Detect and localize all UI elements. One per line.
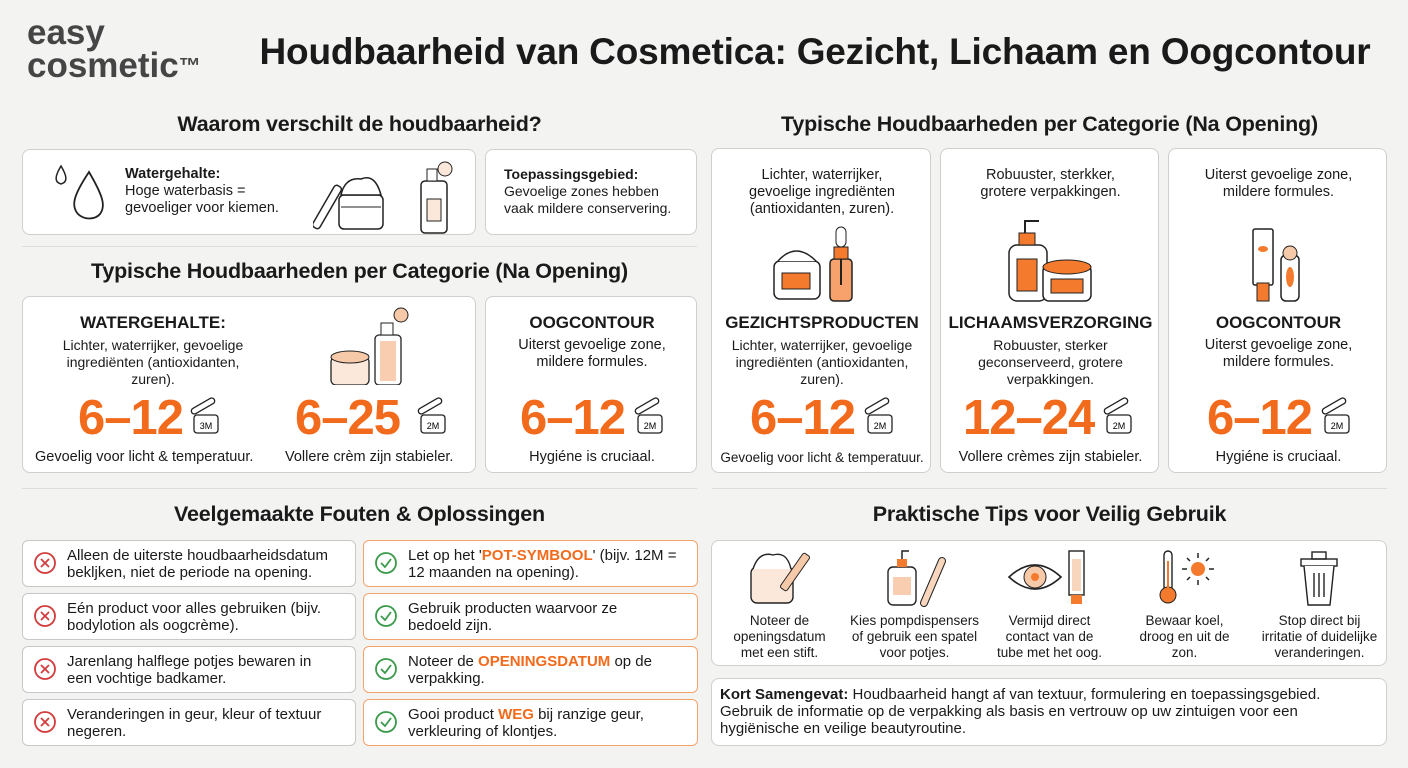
tip 5: Stop direct bij: [1279, 613, 1360, 628]
card: oogcontour: mildere formules.: [1223, 354, 1334, 370]
tip 4: Bewaar koel,: [1145, 613, 1224, 628]
heading: typische left: Typische Houdbaarheden per Categorie (Na Opening): [91, 259, 628, 283]
card: gezichtsproducten: Gevoelig voor licht & temperatuur.: [720, 450, 924, 465]
panel: left categories: Gevoelig voor licht & temperatuur.: [35, 449, 253, 465]
panel: left categories: 3M: [200, 421, 212, 431]
tip 2: [850, 550, 979, 660]
panel: oogcontour left: Hygiéne is cruciaal.: [529, 449, 655, 465]
panel: toepassingsgebied: Gevoelige zones hebben: [504, 183, 659, 199]
heading: fouten: Veelgemaakte Fouten & Oplossingen: [174, 502, 545, 526]
card: lichaamsverzorging: 12–24: [963, 391, 1094, 445]
panel: left categories: Vollere crèm zijn stabieler.: [285, 449, 453, 465]
text: watergehalte: gevoeliger voor kiemen.: [125, 200, 279, 216]
panel: oogcontour left: 6–12: [520, 391, 625, 445]
panel: toepassingsgebied: Toepassingsgebied:: [504, 166, 638, 182]
tip 3: Vermijd direct: [1009, 613, 1090, 628]
number 6-12: 6–12: [78, 391, 183, 445]
number 6-25: 6–25: [295, 391, 400, 445]
tip 4: [1139, 550, 1230, 660]
panel: tips: [711, 540, 1387, 666]
card: gezichtsproducten: (antioxidanten, zuren).: [750, 201, 894, 217]
card: gezichtsproducten: 6–12: [750, 391, 855, 445]
heading: tips: Praktische Tips voor Veilig Gebruik: [873, 502, 1226, 526]
icon: jar + dropper: [773, 226, 853, 302]
tip 1: met een stift.: [741, 645, 818, 660]
tip 3: tube met het oog.: [997, 645, 1102, 660]
card: gezichtsproducten: Lichter, waterrijker,: [762, 167, 882, 183]
card: oogcontour: OOGCONTOUR: [1216, 313, 1341, 332]
list: fouten & oplossingen: Eén product voor alles gebruiken (bijv. bodylotion als oogcrème).: [67, 600, 321, 634]
tip 2: of gebruik een spatel: [852, 629, 977, 644]
logo: easy: [27, 13, 105, 52]
card: lichaamsverzorging: Robuuster, sterkker,: [986, 167, 1115, 183]
panel: left categories: [22, 296, 476, 473]
tip 5: [1262, 551, 1377, 660]
card: gezichtsproducten: zuren).: [800, 371, 844, 387]
panel: oogcontour left: OOGCONTOUR: [529, 313, 655, 332]
list: fouten & oplossingen: Veranderingen in geur, kleur of textuur negeren.: [67, 706, 321, 740]
card: oogcontour: mildere formules.: [1223, 184, 1334, 200]
summary: Kort Samengevat: Houdbaarheid hangt af van textuur, formulering en toepassingsgebied.: [720, 686, 1320, 703]
card: gezichtsproducten: gevoelige ingrediënten: [749, 184, 895, 200]
tip 4: droog en uit de: [1139, 629, 1230, 644]
tip 3: contact van de: [1006, 629, 1093, 644]
card: lichaamsverzorging: Vollere crèmes zijn stabieler.: [959, 449, 1142, 465]
icon: jar and spray: [313, 162, 452, 234]
icon: jar + spray: [330, 308, 408, 385]
card: lichaamsverzorging: 2M: [1113, 421, 1125, 431]
panel: left categories: WATERGEHALTE:: [80, 313, 226, 332]
list: fouten & oplossingen: Noteer de OPENINGSDATUM op de verpakking.: [408, 653, 652, 687]
list: fouten & oplossingen: Alleen de uiterste houdbaarheidsdatum bekljken, niet de periode na opening.: [67, 547, 328, 581]
title: Houdbaarheid van Cosmetica: Gezicht, Lichaam en Oogcontour: [260, 31, 1370, 72]
panel: oogcontour left: Uiterst gevoelige zone,: [518, 337, 666, 353]
panel: left categories: 2M: [427, 421, 439, 431]
card: lichaamsverzorging: LICHAAMSVERZORGING: [948, 313, 1152, 332]
list: fouten & oplossingen: Gooi product WEG bij ranzige geur, verkleuring of klontjes.: [408, 706, 644, 740]
card: oogcontour: [1168, 148, 1387, 473]
card: gezichtsproducten: ingrediënten (antioxidanten,: [736, 354, 908, 370]
panel: oogcontour left: 2M: [644, 421, 656, 431]
card: gezichtsproducten: 2M: [874, 421, 886, 431]
text: watergehalte: Hoge waterbasis =: [125, 183, 246, 199]
logo: [27, 13, 201, 85]
tip 1: [733, 552, 826, 660]
card: gezichtsproducten: [711, 148, 931, 473]
list: fouten & oplossingen: Jarenlang halflege potjes bewaren in een vochtige badkamer.: [67, 653, 311, 687]
icon: water drops: [55, 164, 104, 220]
card: lichaamsverzorging: Robuuster, sterker: [993, 337, 1108, 353]
panel: toepassingsgebied: [485, 149, 697, 235]
panel: watergehalte: [22, 149, 476, 235]
tip 1: openingsdatum: [733, 629, 826, 644]
card: lichaamsverzorging: [940, 148, 1159, 473]
heading: typische right: Typische Houdbaarheden per Categorie (Na Opening): [781, 112, 1318, 136]
card: lichaamsverzorging: grotere verpakkingen.: [980, 184, 1121, 200]
heading: waarom: Waarom verschilt de houdbaarheid?: [177, 112, 542, 136]
text: watergehalte: Watergehalte:: [125, 166, 220, 182]
card: gezichtsproducten: GEZICHTSPRODUCTEN: [725, 313, 919, 332]
list: fouten & oplossingen: Let op het 'POT-SYMBOOL' (bijv. 12M = 12 maanden na opening).: [408, 547, 676, 581]
card: lichaamsverzorging: verpakkingen.: [1007, 371, 1094, 387]
summary: [711, 678, 1387, 746]
tip 5: veranderingen.: [1274, 645, 1365, 660]
card: gezichtsproducten: Lichter, waterrijker, gevoelige: [732, 337, 912, 353]
card: oogcontour: Uiterst gevoelige zone,: [1205, 167, 1352, 183]
logo: cosmetic™: [27, 46, 201, 85]
tip 1: Noteer de: [750, 613, 809, 628]
icon: pump bottle + tub: [1008, 220, 1092, 302]
tip 3: [997, 550, 1102, 660]
card: oogcontour: Uiterst gevoelige zone,: [1205, 337, 1352, 353]
card: oogcontour: 2M: [1331, 421, 1343, 431]
tip 5: irritatie of duidelijke: [1262, 629, 1377, 644]
panel: oogcontour left: [485, 296, 697, 473]
panel: oogcontour left: mildere formules.: [536, 354, 648, 370]
icon: eye tube + roller: [1252, 228, 1300, 302]
tip 2: Kies pompdispensers: [850, 613, 979, 628]
list: fouten & oplossingen: Gebruik producten waarvoor ze bedoeld zijn.: [408, 600, 617, 634]
summary: Gebruik de informatie op de verpakking als basis en vertrouw op uw zintuigen voor een: [720, 703, 1298, 720]
list: fouten & oplossingen: [22, 540, 698, 746]
summary: hygiënische en veilige beautyroutine.: [720, 720, 966, 737]
card: oogcontour: Hygiéne is cruciaal.: [1216, 449, 1341, 465]
card: oogcontour: 6–12: [1207, 391, 1312, 445]
card: lichaamsverzorging: geconserveerd, grotere: [978, 354, 1123, 370]
tip 2: voor potjes.: [880, 645, 949, 660]
tip 4: zon.: [1172, 645, 1197, 660]
panel: toepassingsgebied: vaak mildere conservering.: [504, 200, 671, 216]
text: watergehalte: [125, 166, 279, 216]
panel: left categories: Lichter, waterrijker, gevoelige ingrediënten (antioxidanten, zuren).: [63, 337, 243, 387]
